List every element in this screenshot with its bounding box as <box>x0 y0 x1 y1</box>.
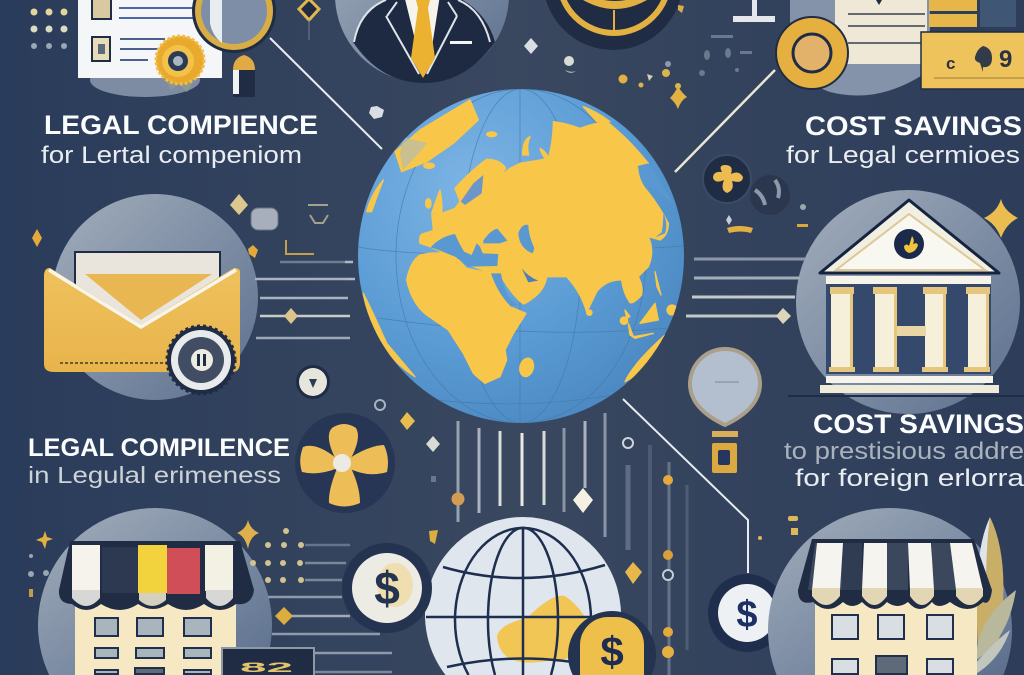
icon: gold dollar coin bottom <box>568 611 656 675</box>
icon: wax seal <box>167 326 235 394</box>
seas <box>431 234 498 267</box>
panel: bank building <box>788 190 1024 414</box>
icon: sparkles around store <box>28 520 304 597</box>
heading: cost savings lower <box>784 409 1024 492</box>
icon: dark sign <box>222 648 314 675</box>
icon: magnifier <box>192 0 276 97</box>
panel: document with seal and magnifier <box>78 0 276 97</box>
heading: cost savings lower: COST SAVINGS <box>813 409 1024 439</box>
globe <box>358 89 684 423</box>
icon: dot grid <box>30 8 68 49</box>
icon: gold ring <box>776 17 848 89</box>
icon: small markers beside envelope <box>32 194 328 258</box>
panel: coin, ledger and cash box <box>776 0 1024 96</box>
icon: dollar coin lower right: $ <box>736 594 758 636</box>
windows <box>832 615 953 674</box>
icon: gold cross badge <box>295 413 395 513</box>
arrow: connector top left <box>270 38 382 149</box>
panel: gold compass badge <box>543 0 683 50</box>
heading: cost savings top <box>786 111 1022 169</box>
heading: legal compliance top: LEGAL COMPIENCE <box>44 110 318 140</box>
panel: storefront with striped awning <box>768 508 1016 675</box>
heading: legal compliance top <box>41 110 318 169</box>
icon: gold seal <box>156 36 204 92</box>
vertical bars chart <box>452 413 687 675</box>
icon: dollar coin lower left: $ <box>374 562 400 614</box>
icon: pediment medallion <box>894 229 924 259</box>
heading: legal compliance lower <box>28 434 290 488</box>
icon: small diamond near globe <box>369 106 384 119</box>
heading: legal compliance lower: LEGAL COMPILENCE <box>28 434 290 462</box>
icon: dollar coin lower left <box>342 543 432 633</box>
icon: gold star <box>670 86 687 109</box>
icon: small pin button <box>296 365 330 399</box>
icon: small scattered markers top centre <box>524 5 684 89</box>
windows <box>95 618 211 674</box>
icon: silver magnifier <box>690 349 760 473</box>
icon: faint cluster <box>699 35 752 76</box>
icon: small gold markers right <box>758 516 798 540</box>
icon: gold four-point star <box>984 199 1018 238</box>
list lines: lower left <box>268 545 392 672</box>
icon: gold diamond outline <box>299 0 319 40</box>
text: lower-right subtitle line 1: to prestisious addre <box>784 438 1024 465</box>
icon: gold cash box <box>921 32 1024 89</box>
text: lower-left subtitle: in Legulal erimeness <box>28 462 281 488</box>
icon: gold dollar coin bottom: $ <box>600 628 624 675</box>
panel: businessman in suit <box>335 0 509 83</box>
icon: dark flower badge with gears <box>703 155 808 233</box>
panel: envelope with seal <box>44 194 258 400</box>
icon: dark sign: 82 <box>240 659 294 675</box>
text: lower-right subtitle line 2: for foreign erlorra <box>795 465 1024 492</box>
icon: gold cash box: c <box>946 54 955 73</box>
text: top-left subtitle: for Lertal compeniom <box>41 142 302 169</box>
heading: cost savings top: COST SAVINGS <box>805 111 1022 141</box>
icon: gold cash box: 9 <box>999 46 1012 73</box>
eurasia land <box>420 122 668 312</box>
icon: laurel leaves <box>970 517 1016 675</box>
icon: display stand <box>733 0 775 22</box>
text: top-right subtitle: for Legal cermioes <box>786 142 1020 169</box>
icon: small markers left of vertical bars <box>375 400 633 544</box>
list lines: right of globe <box>686 259 805 324</box>
arrow: connector top right <box>675 70 775 172</box>
panel: wireframe globe <box>425 517 622 675</box>
panel: storefront with flag awning <box>38 508 314 675</box>
icon: dollar coin lower right <box>708 574 786 652</box>
africa land <box>407 253 526 383</box>
arrow: connector lower right <box>623 399 748 573</box>
list lines: left of globe <box>255 262 355 338</box>
